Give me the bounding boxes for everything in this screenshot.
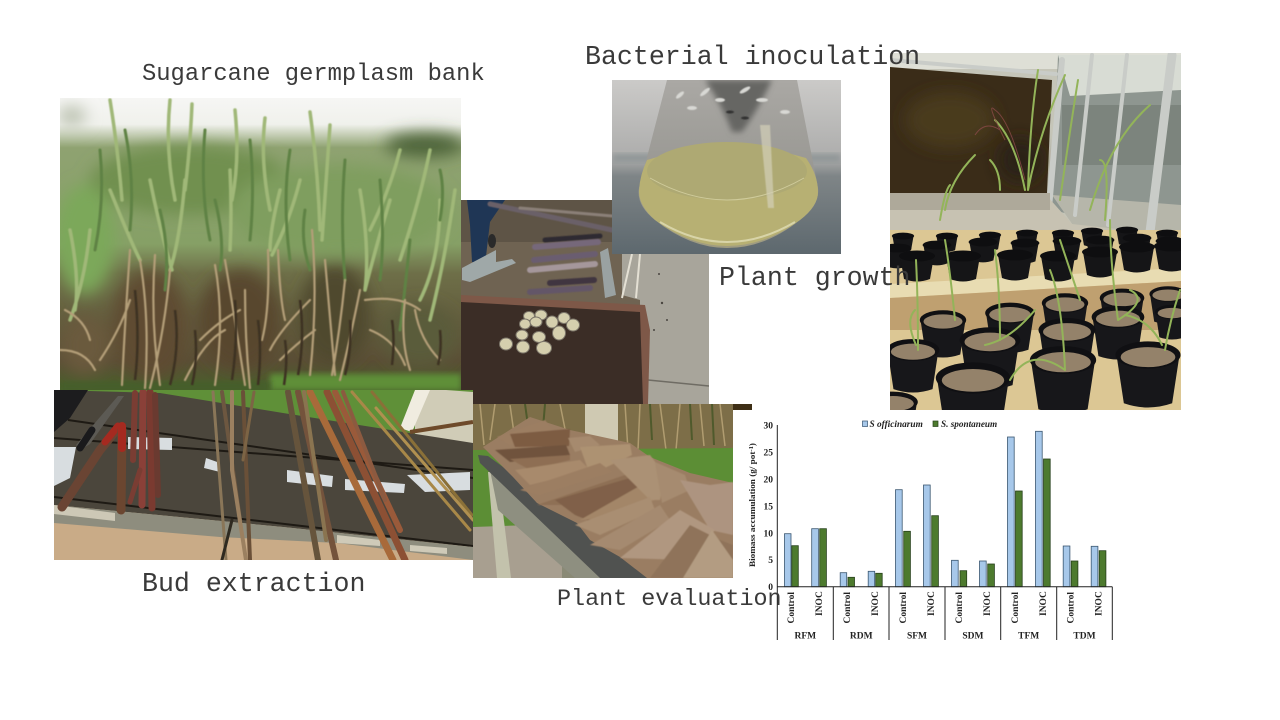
treatment labels: INOC — [1039, 591, 1049, 616]
white papers — [54, 437, 470, 493]
lawn behind table — [88, 390, 473, 434]
heading: bacterial inoculation: Bacterial inoculation — [585, 42, 920, 72]
treatment labels: INOC — [1094, 591, 1104, 616]
group labels: TFM — [1018, 632, 1039, 642]
legend — [862, 419, 997, 430]
treatment labels: INOC — [927, 591, 937, 616]
table top — [490, 470, 600, 578]
photo: sugarcane plants in greenhouse — [890, 53, 1181, 410]
group labels: TDM — [1073, 632, 1096, 642]
treatment labels — [787, 591, 1104, 624]
paper bags — [483, 417, 733, 578]
black bag — [54, 390, 88, 432]
table legs — [488, 472, 511, 578]
back pots — [883, 227, 1190, 282]
shelf — [1047, 200, 1116, 230]
photo: sugarcane germplasm bank — [55, 98, 465, 390]
yellow thin stalks — [352, 392, 473, 530]
group labels — [794, 632, 1096, 642]
pale thin stalks — [213, 392, 254, 560]
roof and glass — [890, 53, 1181, 69]
legend: S. spontaneum — [941, 419, 997, 429]
machete and pruner — [76, 396, 124, 450]
heading: bud extraction: Bud extraction — [142, 569, 365, 599]
wooden shelves — [890, 268, 1181, 298]
y axis ticks: 0 — [768, 583, 773, 593]
treatment labels: Control — [955, 592, 965, 624]
red stalks — [130, 392, 158, 508]
dark strip at top right — [733, 404, 752, 410]
front pots — [890, 286, 1181, 410]
bars: S. officinarum — [784, 431, 1098, 587]
concrete ground — [622, 254, 709, 404]
bud slices — [500, 310, 580, 354]
photo: harvested sugarcane stalks on table — [54, 390, 473, 560]
y axis ticks: 15 — [764, 502, 773, 512]
bars: S. spontaneum — [792, 459, 1106, 587]
group labels: RFM — [794, 632, 816, 642]
group labels: SDM — [962, 632, 983, 642]
blue jeans — [467, 200, 505, 265]
treatment labels: INOC — [871, 591, 881, 616]
y axis ticks: 30 — [764, 422, 773, 432]
y axis ticks: 10 — [764, 530, 773, 540]
legend: S officinarum — [870, 420, 923, 430]
group labels: SFM — [907, 632, 927, 642]
y axis title: ) — [748, 443, 757, 446]
axes and group separators — [777, 425, 1112, 640]
photo: cut sugarcane buds on tray — [461, 200, 709, 404]
frame bars — [890, 55, 1172, 232]
photo: flask with bacterial inoculum — [612, 80, 841, 254]
brown mid stalks — [288, 392, 336, 560]
dark back wall — [890, 67, 1052, 193]
treatment labels: INOC — [815, 591, 825, 616]
white post — [585, 404, 618, 442]
heading: sugarcane germplasm bank: Sugarcane germplasm bank — [142, 61, 485, 88]
y axis ticks: 25 — [764, 448, 773, 458]
tray — [461, 295, 650, 404]
y axis title: Biomass accumulation (g/ pot — [748, 463, 757, 567]
treatment labels: Control — [843, 592, 853, 624]
bar chart: biomass accumulation — [733, 410, 1115, 645]
group labels: RDM — [850, 632, 873, 642]
dark deposits on glass — [705, 80, 772, 132]
treatment labels: INOC — [983, 591, 993, 616]
liquid — [639, 147, 818, 246]
stacked cane sticks — [490, 204, 612, 292]
red-orange stalks — [310, 392, 405, 560]
treatment labels: Control — [899, 592, 909, 624]
y axis ticks: 5 — [768, 556, 773, 566]
treatment labels: Control — [1011, 592, 1021, 624]
treatment labels: Control — [787, 592, 797, 624]
cane background — [473, 404, 752, 450]
y axis ticks: 20 — [764, 476, 773, 486]
y axis ticks — [764, 422, 773, 593]
pavement — [474, 526, 518, 528]
heading: plant growth: Plant growth — [719, 263, 911, 293]
plants — [910, 70, 1180, 380]
table planks — [54, 390, 473, 547]
photo: paper bags of plant samples on table — [473, 404, 752, 578]
heading: plant evaluation: Plant evaluation — [557, 587, 782, 613]
treatment labels: Control — [1066, 592, 1076, 624]
lawn — [473, 448, 733, 530]
y axis title: -1 — [749, 446, 755, 452]
table edge — [54, 505, 473, 560]
